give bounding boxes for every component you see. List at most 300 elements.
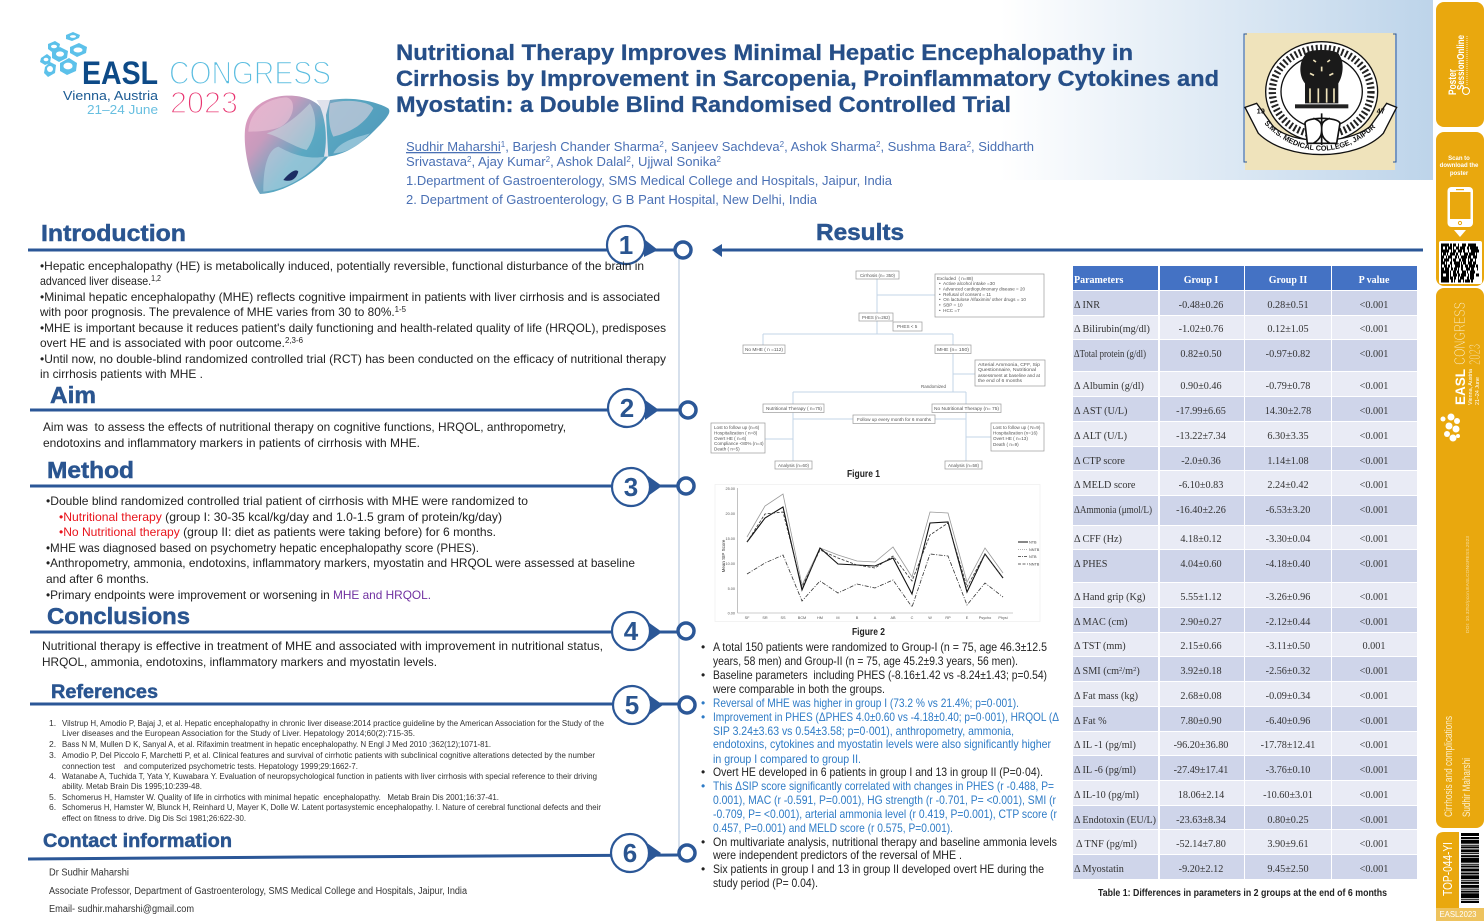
legend: NNTB [1029, 548, 1040, 552]
box: PHES n=262: PHES (n=262) [862, 315, 890, 320]
connector 5 [30, 686, 695, 724]
connector 2: 2 [620, 393, 634, 423]
x axis labels: SR [762, 616, 768, 620]
row INR: -0.48±0.26 [1179, 300, 1223, 311]
row SMI [1073, 657, 1417, 681]
row Ammonia: <0.001 [1360, 505, 1388, 516]
box: MHE: MHE (n= 150) [937, 347, 970, 352]
row IL-1: <0.001 [1360, 740, 1388, 751]
list: references: Schomerus H, Hamster W, Blunck H, Reinhard U, Mayer K, Dolle W. Latent portasystemic encephalopathy. I. Nature of cerebral functional defects and their [62, 802, 601, 812]
row INR [1073, 291, 1417, 315]
row Total protein [1073, 340, 1417, 371]
row MAC: Δ MAC (cm) [1074, 617, 1128, 628]
text: introduction body: •Minimal hepatic encephalopathy (MHE) reflects cognitive impairment in patients with liver cirrhosis and is associated [40, 290, 660, 304]
emblem year right: 47 [1377, 106, 1385, 115]
scan instructions [1440, 156, 1479, 177]
caption: Figure 2: Figure 2 [852, 627, 885, 638]
heading: Contact information: Contact information [43, 831, 232, 852]
row AST: <0.001 [1360, 406, 1388, 417]
row MELD: <0.001 [1360, 480, 1388, 491]
row Hand grip: -3.26±0.96 [1266, 592, 1310, 603]
list: references: connection test and computerized psychometric tests. Hepatology 1999;29:1662-7. [62, 761, 358, 771]
sidebar panel: congress branding [1436, 288, 1484, 828]
authors and affiliations: 2 [467, 155, 472, 164]
x axis labels: AB [890, 616, 896, 620]
Method section [30, 457, 694, 602]
row SMI: 2 [1119, 666, 1122, 673]
authors and affiliations: , Sanjeev Sachdeva [664, 139, 780, 154]
heading: Method: Method [47, 457, 134, 483]
box: lost left: Hospitalization ( n=8) [714, 430, 758, 436]
text: introduction body: 2,3-6 [285, 336, 304, 345]
Figure 1 flowchart [711, 271, 1045, 469]
authors and affiliations: , Barjesh Chander Sharma [505, 139, 660, 154]
row MELD: -6.10±0.83 [1179, 480, 1223, 491]
caption: Figure 1: Figure 1 [847, 469, 880, 480]
text: method body: •MHE was diagnosed based on psychometry hepatic encephalopathy score (PHES). [46, 541, 479, 555]
Results bullet list [701, 640, 1059, 890]
sidebar DOI: DOI: 10.3252/pcon.EASLCONGRESS.2023 [1465, 536, 1470, 633]
legend [1018, 540, 1040, 566]
Results bullet list: were comparable in both the groups. [712, 682, 885, 696]
row MAC: <0.001 [1360, 617, 1388, 628]
row IL-1: -96.20±36.80 [1174, 740, 1228, 751]
box: lost right: Lost to follow up ( N=9) [993, 425, 1041, 430]
row CTP: Δ CTP score [1074, 456, 1125, 467]
logo 2023: 2023 [170, 85, 238, 120]
table header: P value [1359, 275, 1390, 286]
row MELD [1073, 471, 1417, 495]
box: follow up: Follow up every month for 6 months [857, 417, 932, 422]
box: lost left: Compliance <80% (n=4) [714, 441, 764, 446]
authors and affiliations: , Ajay Kumar [471, 154, 546, 169]
x axis labels: HM [817, 616, 823, 620]
row Total protein: -0.97±0.82 [1266, 349, 1310, 360]
list: references: 5. [49, 792, 56, 802]
Results bullet list: • [701, 835, 705, 849]
table header [1073, 266, 1417, 290]
emblem ribbon text: S.M.S. MEDICAL COLLEGE, JAIPUR [1264, 120, 1376, 151]
row PHES: 4.04±0.60 [1180, 559, 1222, 570]
Results bullet list: Improvement in PHES (ΔPHES 4.0±0.60 vs -4.18±0.40; p=0·001), HRQOL (Δ [713, 710, 1059, 724]
row Total protein: 0.82±0.50 [1180, 349, 1222, 360]
y axis labels: 5.00 [728, 587, 735, 591]
row PHES: Δ PHES [1074, 559, 1108, 570]
connector 6: 6 [623, 838, 637, 868]
table header: Parameters [1074, 275, 1124, 286]
row Albumin [1073, 372, 1417, 396]
text: aim body: Aim was to assess the effects of nutritional therapy on cognitive functions, HRQOL, anthropometry, [43, 420, 566, 434]
row Bilirubin: <0.001 [1360, 324, 1388, 335]
Results header [712, 219, 1423, 257]
connector 4 [30, 612, 694, 650]
box: lost right: Overt HE ( n=13) [993, 436, 1028, 441]
row Endotoxin: 0.80±0.25 [1267, 815, 1309, 826]
row TNF: Δ TNF (pg/ml) [1076, 839, 1137, 850]
box: assessments: Arterial Ammonia, CFF, Sip [978, 362, 1040, 367]
y axis title: Mean SIP Score [721, 539, 726, 572]
series NTB baseline [747, 507, 1003, 594]
Results bullet list: in group I compared to group II. [713, 752, 861, 766]
row INR: <0.001 [1360, 300, 1388, 311]
box: analysis right: Analysis (n=58) [948, 463, 979, 468]
y axis labels [725, 487, 735, 616]
row ALT: <0.001 [1360, 431, 1388, 442]
row Albumin: <0.001 [1360, 381, 1388, 392]
table header: Group II [1269, 275, 1307, 286]
row Bilirubin [1073, 316, 1417, 339]
authors and affiliations: , Ashok Dalal [550, 154, 626, 169]
Results bullet list: Baseline parameters including PHES (-8.16±1.42 vs -8.24±1.43; p=0.54) [713, 668, 1047, 682]
Results bullet list: 0.001), MAC (r -0.591, P=0.001), HG strength (r -0.701, P= <0.001), SMI (r [713, 793, 1056, 807]
text: introduction body: with poor prognosis. The prevalence of MHE varies from 30 to 80%. [40, 305, 400, 319]
box: lost left [711, 423, 765, 453]
box: lost left: Lost to follow up (n=6) [714, 425, 760, 430]
series NTB end [747, 554, 1003, 607]
row Hand grip: <0.001 [1360, 592, 1388, 603]
sidebar location: Vienna, Austria [1468, 368, 1474, 405]
text: conclusions body: Nutritional therapy is effective in treatment of MHE and associated with improvement in nutritional status, [42, 639, 603, 653]
row MAC: 2.90±0.27 [1180, 617, 1222, 628]
icon: phone [1448, 187, 1473, 227]
text: introduction body: 1,2 [151, 274, 161, 283]
row IL-6 [1073, 756, 1417, 780]
college emblem [1244, 33, 1398, 170]
row TST: -3.11±0.50 [1266, 641, 1310, 652]
Conclusions section [30, 603, 694, 669]
connector 3: 3 [624, 472, 638, 502]
Aim section [30, 382, 696, 450]
illustration: liver [245, 96, 389, 194]
row TST: 2.15±0.66 [1180, 641, 1222, 652]
row Bilirubin: 0.12±1.05 [1267, 324, 1309, 335]
sidebar dotted arrow [1462, 35, 1470, 94]
row IL-10: <0.001 [1360, 790, 1388, 801]
box: excluded: • Advanced cardiopulmonary disease = 20 [939, 286, 1025, 292]
timeline vertical rule [678, 258, 680, 860]
box: analysis left: Analysis (n=60) [778, 463, 809, 468]
row Fat percent [1073, 707, 1417, 731]
Results bullet list: • [701, 862, 705, 876]
row Hand grip: Δ Hand grip (Kg) [1074, 592, 1145, 603]
box: cirrhosis [856, 271, 899, 279]
box: no nutritional therapy: No Nutritional Therapy (n= 75) [934, 406, 999, 411]
text: introduction body: in cirrhosis patients with MHE . [40, 367, 203, 381]
row AST: 14.30±2.78 [1265, 406, 1311, 417]
row IL-1: -17.78±12.41 [1261, 740, 1315, 751]
title: Cirrhosis by Improvement in Sarcopenia, Proinflammatory Cytokines and [396, 66, 1219, 91]
row INR: Δ INR [1074, 300, 1100, 311]
sidebar panel: Poster Session Online [1436, 2, 1484, 127]
strip: EASL2023: EASL2023 [1440, 909, 1477, 919]
box: no MHE [743, 345, 785, 354]
connector 1: 1 [619, 230, 633, 260]
box: nutritional therapy: Nutritional Therapy ( n=75) [766, 406, 822, 411]
series NNTB end [747, 512, 1003, 587]
authors and affiliations: , Sushma Bara [880, 139, 967, 154]
Contact information section [28, 831, 695, 915]
heading: Results: Results [816, 219, 904, 245]
authors and affiliations: 1 [501, 140, 506, 149]
scan instructions: Scan to [1448, 156, 1470, 162]
row IL-1 [1073, 732, 1417, 755]
box: lost left: Death ( n=5) [714, 446, 740, 452]
sidebar CONGRESS: CONGRESS [1452, 302, 1469, 365]
row Hand grip [1073, 583, 1417, 607]
row CTP: 1.14±1.08 [1267, 456, 1309, 467]
text: introduction body: advanced liver disease. [40, 274, 165, 288]
row Albumin: -0.79±0.78 [1266, 381, 1310, 392]
authors and affiliations: 2 [717, 155, 722, 164]
row AST: -17.99±6.65 [1176, 406, 1226, 417]
row Fat percent: <0.001 [1360, 716, 1388, 727]
Results bullet list: 0.457, P=0.001) and MELD score (r 0.575, P=0.001). [713, 821, 953, 835]
y axis labels: 25.00 [725, 487, 735, 491]
box: excluded: • Refusal of consent = 11 [939, 292, 991, 297]
box: excluded: • SBP = 10 [939, 302, 963, 308]
logo: EASL Congress 2023 [40, 32, 331, 120]
box: analysis left [775, 461, 812, 469]
box: excluded: • On lactulose /rifaximin/ other drugs = 10 [939, 297, 1026, 302]
Introduction section [28, 220, 691, 381]
row Myostatin [1073, 855, 1417, 879]
row ALT: Δ ALT (U/L) [1074, 431, 1127, 442]
row IL-1: Δ IL -1 (pg/ml) [1074, 740, 1136, 751]
box: lost right: Hospitalization (n=16) [993, 430, 1038, 436]
row Ammonia: -16.40±2.26 [1176, 505, 1226, 516]
row MELD: 2.24±0.42 [1267, 480, 1309, 491]
row IL-6: <0.001 [1360, 765, 1388, 776]
box: nutritional therapy [763, 404, 824, 412]
title: Myostatin: a Double Blind Randomised Controlled Trial [396, 92, 1011, 117]
sidebar category: Cirrhosis and complications [1443, 716, 1455, 817]
text: introduction body [39, 259, 666, 381]
box: lost right [991, 423, 1044, 451]
row Albumin: 0.90±0.46 [1180, 381, 1222, 392]
list: references: Vilstrup H, Amodio P, Bajaj J, et al. Hepatic encephalopathy in chronic liver disease:2014 practice guideline by the American Association for the Study of the [62, 718, 604, 728]
row INR: 0.28±0.51 [1267, 300, 1309, 311]
Results bullet list: Overt HE developed in 6 patients in group I and 13 in group II (P=0·04). [713, 765, 1043, 779]
row SMI: Δ SMI (cm [1074, 666, 1119, 677]
row IL-10: 18.06±2.14 [1178, 790, 1224, 801]
text: introduction body: •MHE is important because it reduces patient's daily functioning and health-related quality of life (HRQOL), predisposes [40, 321, 666, 335]
row Endotoxin [1073, 806, 1417, 829]
row Fat mass: <0.001 [1360, 691, 1388, 702]
text: contact details [49, 868, 467, 915]
row AST: Δ AST (U/L) [1074, 406, 1127, 417]
Results bullet list: • [701, 710, 705, 724]
authors and affiliations: 2 [659, 140, 664, 149]
row ALT: -13.22±7.34 [1176, 431, 1226, 442]
list: references: 4. [49, 771, 56, 781]
authors and affiliations: Srivastava [406, 154, 467, 169]
table caption: Table 1: Differences in parameters in 2 groups at the end of 6 months [1098, 888, 1387, 899]
row PHES: -4.18±0.40 [1266, 559, 1310, 570]
box: lost right: Death ( n=9) [993, 442, 1019, 447]
authors and affiliations: Sudhir Maharshi [406, 139, 501, 154]
row Fat mass: -0.09±0.34 [1266, 691, 1310, 702]
list: references: effect on fitness to drive. Dig Dis Sci 1981;26:622-30. [62, 813, 246, 823]
logo location: Vienna, Austria [63, 88, 159, 103]
row CFF: <0.001 [1360, 534, 1388, 545]
x axis labels: SS [780, 616, 786, 620]
x axis labels: BCM [798, 616, 806, 620]
text: contact details: Associate Professor, Department of Gastroenterology, SMS Medical College and Hospitals, Jaipur, India [49, 886, 467, 897]
x axis labels: SF [745, 616, 750, 620]
box: analysis right [945, 461, 982, 469]
series NNTB baseline [747, 494, 1003, 585]
arrow: results rule [712, 244, 1423, 257]
list: references: ability. Metab Brain Dis 1995;10:239-48. [62, 781, 202, 791]
row TST: Δ TST (mm) [1074, 641, 1126, 652]
box: excluded: • HCC =7 [939, 308, 960, 313]
box: no MHE: No MHE ( n =112) [745, 347, 783, 352]
row IL-6: -27.49±17.41 [1174, 765, 1228, 776]
sidebar logo word Poster: Poster [1447, 68, 1459, 95]
Figure 2 line chart [715, 484, 1040, 622]
row SMI: 2 [1133, 666, 1136, 673]
table header: Group I [1184, 275, 1218, 286]
sidebar panel: scan QR [1436, 132, 1484, 286]
row MELD: Δ MELD score [1074, 480, 1136, 491]
box: PHES less than 5: PHES < 5 [897, 324, 918, 329]
text: introduction body: 1-5 [395, 305, 407, 314]
Results bullet list: • [701, 779, 705, 793]
Results bullet list: endotoxins, cytokines and myostatin levels were also significantly higher [713, 737, 1051, 751]
connector 1 [28, 226, 691, 264]
x axis labels: C [911, 616, 914, 620]
Results bullet list: Six patients in group I and 13 in group II developed overt HE during the [713, 862, 1044, 876]
list: references: 1. [49, 718, 56, 728]
y axis labels: 15.00 [725, 537, 735, 541]
text: method body [46, 494, 635, 602]
box: MHE [935, 345, 971, 354]
row Ammonia: -6.53±3.20 [1266, 505, 1310, 516]
text: conclusions body: HRQOL, ammonia, endotoxins, inflammatory markers and myostatin levels. [42, 655, 437, 669]
row Fat mass: Δ Fat mass (kg) [1074, 691, 1138, 702]
row MAC: -2.12±0.44 [1266, 617, 1310, 628]
connector 6 [28, 834, 695, 872]
text: contact details: Email- sudhir.maharshi@gmail.com [49, 904, 194, 915]
Results bullet list: On multivariate analysis, nutritional therapy and baseline ammonia levels [713, 835, 1057, 849]
text: method body: •No Nutritional therapy (group II: diet as patients were taking before) for 6 months. [59, 525, 496, 539]
References section [30, 682, 695, 823]
box: assessments: Questionnaire, Nutritional [978, 367, 1036, 372]
text: conclusions body [42, 639, 603, 669]
sidebar EASL: EASL [1452, 369, 1468, 405]
box: excluded: • Active alcohol intake =30 [939, 281, 995, 286]
row SMI: -2.56±0.32 [1266, 666, 1310, 677]
Results bullet list: This ΔSIP score significantly correlated with changes in PHES (r -0.488, P= [713, 779, 1054, 793]
authors and affiliations: 1.Department of Gastroenterology, SMS Medical College and Hospitals, Jaipur, India [406, 173, 893, 188]
text: method body: •Nutritional therapy (group I: 30-35 kcal/kg/day and 1.0-1.5 gram of protein/kg/day) [59, 510, 502, 524]
connector 3 [30, 468, 694, 506]
Results bullet list: A total 150 patients were randomized to Group-I (n = 75, age 46.3±12.5 [713, 640, 1047, 654]
scan instructions: poster [1450, 171, 1469, 177]
row Bilirubin: -1.02±0.76 [1179, 324, 1223, 335]
box: cirrhosis: Cirrhosis (n= 350) [860, 273, 895, 278]
label: randomized: Randomized [921, 384, 946, 389]
box: assessments: the end of 6 months [978, 378, 1023, 383]
row CTP: <0.001 [1360, 456, 1388, 467]
barcode [1459, 832, 1484, 908]
row Endotoxin: -23.63±8.34 [1176, 815, 1226, 826]
header gradient background [1000, 0, 1433, 180]
x axis labels: B [856, 616, 859, 620]
x axis labels: W [928, 616, 932, 620]
box: excluded: Excluded ( n=88) [937, 276, 974, 281]
x axis labels: A [874, 616, 877, 620]
row SMI: ) [1136, 666, 1140, 677]
authors and affiliations: , Siddharth [971, 139, 1034, 154]
row SMI: 3.92±0.18 [1180, 666, 1222, 677]
row Total protein: <0.001 [1360, 349, 1388, 360]
row CFF: -3.30±0.04 [1266, 534, 1310, 545]
text: method body: and after 6 months. [46, 572, 149, 586]
row SMI: /m [1122, 666, 1133, 677]
row PHES [1073, 550, 1417, 582]
list: references: 3. [49, 750, 56, 760]
row TNF: 3.90±9.61 [1267, 839, 1309, 850]
list: references: 6. [49, 802, 56, 812]
authors and affiliations: 2 [780, 140, 785, 149]
x axis labels: E [966, 616, 969, 620]
list: references: Liver diseases and the European Association for the Study of Liver. Hepatology 2014;60(2):715-35. [62, 728, 415, 738]
icon: hexagon cluster [40, 32, 87, 77]
row Total protein: ΔTotal protein (g/dl) [1074, 349, 1146, 360]
Results bullet list: Reversal of MHE was higher in group I (73.2 % vs 21.4%; p=0·001). [713, 696, 1019, 710]
row Fat percent: -6.40±0.96 [1266, 716, 1310, 727]
box: follow up [853, 415, 935, 424]
row Fat percent: Δ Fat % [1074, 716, 1107, 727]
sidebar author: Sudhir Maharshi [1461, 758, 1473, 817]
row IL-10: -10.60±3.01 [1263, 790, 1313, 801]
text: aim body [43, 420, 566, 450]
logo CONGRESS: CONGRESS [169, 55, 331, 91]
flow connectors [763, 279, 991, 461]
Results bullet list: were independent predictors of the reversal of MHE . [712, 848, 962, 862]
Results bullet list: • [701, 640, 705, 654]
text: introduction body: •Until now, no double-blind randomized controlled trial (RCT) has been conducted on the efficacy of nutritional therapy [40, 352, 666, 366]
poster code: TOP-044-YI [1441, 842, 1455, 896]
legend: NNTB [1029, 562, 1040, 566]
row Myostatin: -9.20±2.12 [1179, 864, 1223, 875]
Table 1 [1073, 266, 1417, 879]
row TNF [1073, 830, 1417, 854]
sidebar 2023: 2023 [1467, 344, 1484, 365]
y axis labels: 10.00 [725, 562, 735, 566]
box: excluded [935, 274, 1044, 317]
row SMI: <0.001 [1360, 666, 1388, 677]
row Bilirubin: Δ Bilirubin(mg/dl) [1074, 324, 1150, 335]
list: references: Watanabe A, Tuchida T, Yata Y, Kuwabara Y. Evaluation of neuropsychological function in patients with liver cirrhosis with special reference to their driving [62, 771, 597, 781]
box: PHES n=262 [859, 313, 893, 321]
text: introduction body: •Hepatic encephalopathy (HE) is metabolically induced, potentially reversible, functional disturbance of the brain in [40, 259, 644, 273]
text: method body: •Anthropometry, ammonia, endotoxins, inflammatory markers, myostatin and HRQOL were assessed at baseline [46, 556, 635, 570]
row TNF: -52.14±7.80 [1176, 839, 1226, 850]
list: references: 2. [49, 739, 56, 749]
logo dates: 21–24 June [87, 102, 158, 117]
Results bullet list: -0.709, P= <0.001), arterial ammonia level (r 0.419, P=0.001), CTP score (r [713, 807, 1057, 821]
box: PHES less than 5 [893, 322, 922, 331]
Results bullet list: • [701, 668, 705, 682]
authors and affiliations [406, 139, 1034, 207]
row CTP: -2.0±0.36 [1181, 456, 1221, 467]
Results bullet list: SIP 3.24±3.63 vs 0.54±3.58; p=0·001), anthropometry, ammonia, [713, 724, 1014, 738]
row IL-10 [1073, 781, 1417, 805]
authors and affiliations: 2. Department of Gastroenterology, G B Pant Hospital, New Delhi, India [406, 192, 818, 207]
row Fat percent: 7.80±0.90 [1180, 716, 1222, 727]
